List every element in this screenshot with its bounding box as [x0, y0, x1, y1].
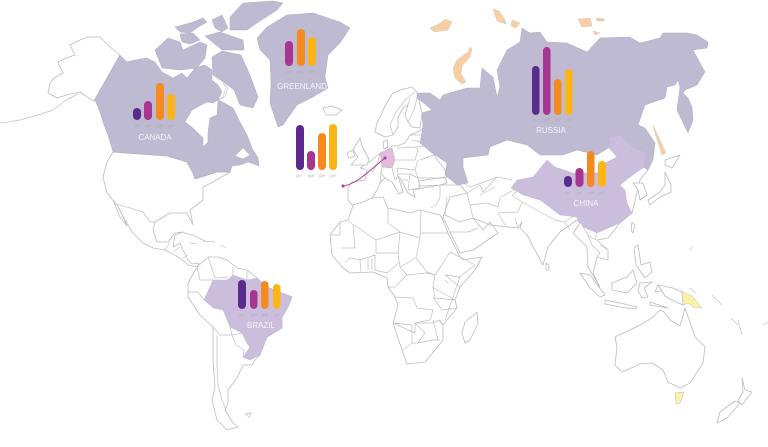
connector from Germany to chart [342, 156, 386, 188]
Pacific islands [445, 246, 768, 335]
chart: Canada: 2009 [156, 123, 164, 129]
country: Canada [95, 1, 283, 179]
New Zealand [717, 378, 752, 423]
Eurasia mainland [348, 110, 648, 287]
Philippines [634, 245, 652, 278]
chart: Russia: 2009 [554, 117, 562, 123]
Borneo [612, 270, 637, 293]
South America [188, 257, 292, 430]
Baffin Island [212, 51, 258, 108]
chart: Greenland: 2010 [308, 69, 316, 75]
Gulf of St Lawrence [235, 148, 250, 159]
chart: Germany: 2007 [295, 173, 303, 179]
chart: China: 2009 [587, 190, 595, 196]
Aleutian islands [0, 94, 78, 123]
Australia [615, 308, 705, 388]
Great Britain and Ireland [351, 138, 369, 165]
chart: Germany: 2010 [329, 173, 337, 179]
North America borders [116, 204, 188, 258]
country: Brazil [204, 275, 292, 360]
Madagascar [462, 312, 478, 343]
chart: Brazil: 2010 [273, 312, 281, 318]
Hudson Bay [185, 83, 228, 147]
Africa borders [330, 208, 475, 350]
chart: Canada [133, 83, 175, 142]
chart: Greenland: 2008 [285, 69, 293, 75]
Ireland [347, 150, 355, 158]
Sumatra and Java [580, 273, 637, 309]
New Guinea west [658, 285, 683, 305]
chart: Greenland [277, 29, 327, 91]
chart: Germany [295, 124, 337, 179]
South America borders [188, 257, 250, 410]
chart: Brazil: 2008 [250, 312, 258, 318]
label: Greenland: GREENLAND [277, 82, 327, 91]
label: Canada: CANADA [138, 133, 172, 142]
chart: Russia: 2008 [543, 117, 551, 123]
chart: Germany: 2009 [318, 173, 326, 179]
Scandinavia borders [390, 92, 417, 135]
chart: Canada: 2007 [133, 123, 141, 129]
Falklands [245, 413, 251, 417]
chart: Canada: 2008 [144, 123, 152, 129]
yellow highlights: Papua New Guinea [682, 291, 702, 308]
country: China [511, 135, 647, 233]
Alaska [48, 37, 120, 101]
USA, Mexico and Central America [103, 152, 230, 267]
chart: Russia: 2010 [565, 117, 573, 123]
Denmark [383, 140, 388, 149]
label: China: CHINA [574, 199, 599, 208]
Sulawesi and Moluccas [638, 282, 668, 308]
yellow highlights: Tasmania [675, 392, 684, 404]
chart: Russia: 2007 [532, 117, 540, 123]
chart: China [564, 151, 606, 208]
chart: China: 2007 [564, 190, 572, 196]
Sri Lanka [546, 263, 549, 270]
Iceland [323, 106, 342, 115]
Caribbean islands [182, 232, 226, 248]
Black Sea [419, 177, 447, 186]
chart: Greenland: 2009 [296, 69, 304, 75]
country: Russia [417, 28, 708, 185]
chart: Canada: 2010 [167, 123, 175, 129]
label: Russia: RUSSIA [536, 126, 567, 135]
chart: Brazil: 2007 [238, 312, 246, 318]
Arctic islands [155, 1, 283, 70]
label: Brazil: BRAZIL [247, 321, 276, 330]
Taiwan [631, 222, 635, 233]
Japan [648, 155, 680, 205]
chart: China: 2010 [598, 190, 606, 196]
Scandinavia [375, 87, 422, 137]
chart: China: 2008 [575, 190, 583, 196]
chart: Brazil [238, 280, 281, 330]
chart: Germany: 2008 [307, 173, 315, 179]
Arctic Russian islands in peach [430, 9, 666, 155]
country: Germany [380, 148, 395, 168]
Korea [633, 183, 647, 200]
Europe and Asia borders [372, 127, 608, 257]
Africa [330, 197, 482, 364]
country: Greenland [257, 13, 350, 127]
chart: Russia [532, 47, 573, 135]
chart: Brazil: 2009 [261, 312, 269, 318]
